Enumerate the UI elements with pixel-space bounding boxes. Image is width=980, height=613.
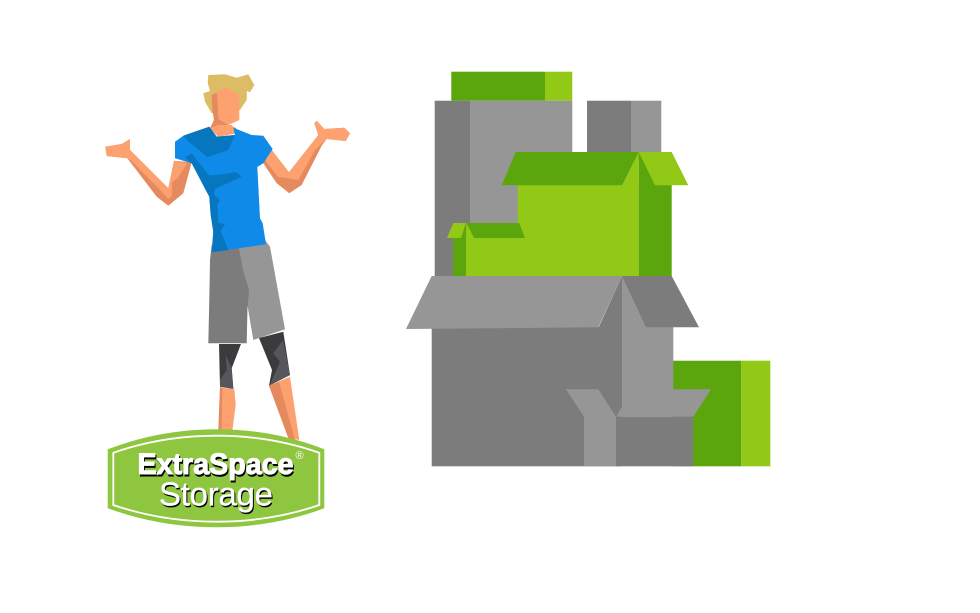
logo wordmark: ExtraSpace: ExtraSpace — [138, 450, 294, 483]
logo: Extra Space Storage — [108, 429, 324, 527]
hair — [203, 74, 254, 113]
small open green box — [447, 223, 525, 276]
left arm — [105, 139, 192, 206]
logo wordmark: ExtraSpace: ExtraSpace — [138, 448, 294, 481]
logo wordmark: Storage: Storage — [160, 477, 274, 514]
shorts — [208, 240, 285, 343]
boxes stack — [406, 72, 770, 466]
legs — [218, 377, 299, 440]
head and neck — [210, 88, 239, 137]
top green box — [451, 72, 572, 101]
t-shirt — [175, 127, 273, 252]
large open green box — [502, 152, 688, 276]
tall gray box — [435, 101, 572, 277]
large open gray box — [406, 276, 711, 466]
registered mark: ® — [296, 450, 304, 462]
leggings — [219, 332, 290, 389]
figure: shrugging man — [105, 74, 350, 440]
green box lower right — [673, 361, 770, 466]
right gray box — [587, 101, 661, 161]
logo wordmark: Storage: Storage — [159, 476, 273, 512]
right arm — [262, 121, 350, 193]
logo badge — [108, 429, 324, 527]
